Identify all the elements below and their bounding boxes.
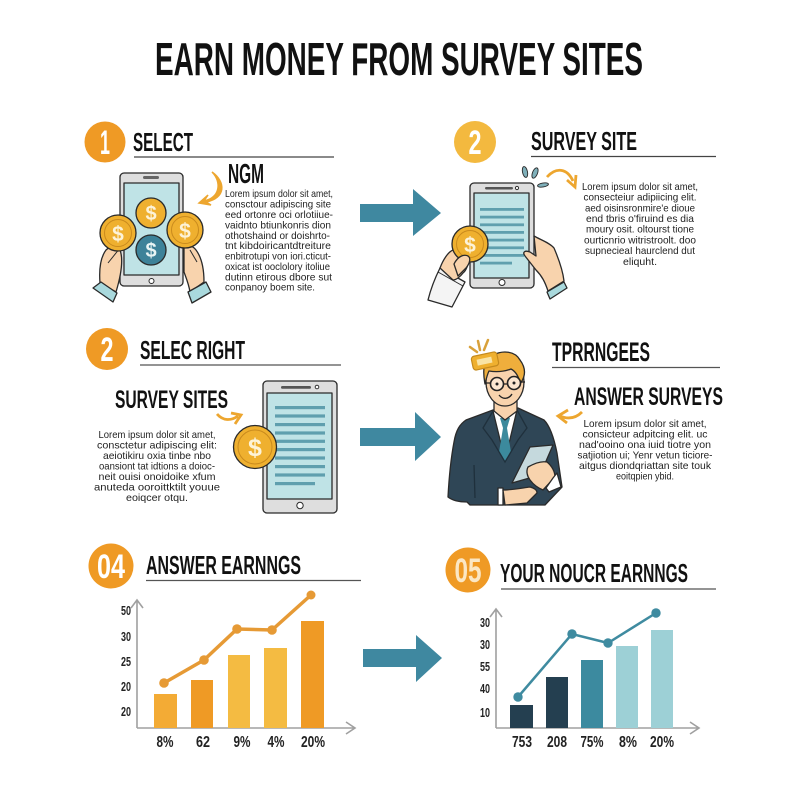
- text block: step 4 body: consicteur adpitcing elit. uc: [582, 428, 708, 440]
- badge: number 2: [454, 121, 496, 163]
- bar chart: teal earnings: 20%: [650, 734, 674, 751]
- badge: number 1: [84, 122, 126, 162]
- icon: gold crown badge: [470, 340, 499, 371]
- badge: number 05: 05: [454, 552, 482, 590]
- text block: step 2 body: moury osit. oltourst tione: [586, 224, 694, 236]
- panel: step 3 select right: [86, 328, 341, 513]
- panel: step 1 select: [84, 122, 334, 303]
- badge: number 2: [86, 328, 128, 370]
- icon: phone with coins and hands: $: [145, 203, 157, 225]
- badge: number 05: [446, 548, 490, 592]
- text block: step 3 body: anuteda ooroittktilt youue: [94, 482, 220, 494]
- subheading: survey sites: SURVEY SITES: [115, 386, 228, 414]
- icon: phone held in hands with coin: [428, 183, 567, 307]
- bar chart: orange earnings: 50: [121, 603, 131, 618]
- badge: number 2: 2: [100, 331, 114, 369]
- text block: step 2 body: end tbris o'firuind es dia: [586, 213, 694, 225]
- icon: phone with coins and hands: $: [145, 240, 157, 262]
- bar chart: teal earnings: 40: [480, 681, 490, 696]
- text block: step 3 body: neit ouisi onoidoike xfum: [98, 471, 216, 483]
- text block: step 1 body: vaidnto btiunkonris dion: [225, 219, 331, 231]
- heading: survey site: SURVEY SITE: [531, 126, 637, 156]
- text block: step 1 body: eed ortonre oci orlotiiue-: [225, 209, 333, 221]
- arrow: step 3 to 4: [360, 412, 441, 461]
- text block: step 1 body: Lorem ipsum dolor sit amet,: [225, 188, 333, 200]
- panel: step 4 answer surveys: [448, 337, 723, 505]
- text block: step 2 body: consecteiur adipiicing elit.: [584, 192, 696, 204]
- bar chart: teal earnings: [480, 608, 699, 751]
- text block: step 3 body: consctetur adipiscing elit:: [97, 440, 217, 452]
- icon: phone held in hands with coin: $: [464, 234, 476, 257]
- bar chart: orange earnings: 25: [121, 654, 131, 669]
- badge: number 1: 1: [100, 124, 110, 162]
- bar chart: orange earnings: 9%: [234, 734, 250, 751]
- arrow: curved orange: [217, 413, 241, 424]
- bar chart: teal earnings: 30: [480, 615, 490, 630]
- badge: number 04: 04: [97, 548, 125, 586]
- arrow: curved orange: [199, 172, 222, 205]
- text block: step 2 body: [582, 181, 698, 268]
- text block: step 4 body: nad'ooino ona iuid tiotre yon: [579, 439, 711, 451]
- bar chart: orange earnings: 20: [121, 679, 131, 694]
- text block: step 1 body: dutinn etirous dbore sut: [225, 271, 332, 283]
- text block: step 4 body: eoitqpien ybid.: [616, 470, 674, 482]
- text block: step 2 body: eliquht.: [623, 256, 657, 268]
- text block: step 3 body: oansiont tat idtions a doioc-: [99, 460, 215, 472]
- bar chart: teal earnings: 208: [547, 734, 567, 751]
- text block: step 1 body: tnt kibdoiricantdtreiture: [225, 240, 331, 252]
- badge: number 04: [88, 544, 134, 588]
- text block: step 3 body: eoiqcer otqu.: [126, 492, 188, 504]
- arrow: step 1 to 2: [360, 189, 441, 236]
- text block: step 4 body: aitgus diondqriattan site touk: [579, 460, 712, 472]
- panel: step 2 survey site: [428, 121, 716, 307]
- bar chart: teal earnings: 8%: [619, 734, 637, 751]
- subheading: NGM: NGM: [228, 158, 264, 189]
- heading: selec right: SELEC RIGHT: [140, 335, 245, 365]
- icon: phone with coins and hands: [93, 173, 211, 303]
- heading: answer earnngs: ANSWER EARNNGS: [146, 550, 301, 580]
- text block: step 4 body: [578, 418, 713, 482]
- badge: number 2: 2: [468, 124, 482, 162]
- icon: phone with coin: [234, 381, 337, 513]
- bar chart: teal earnings: 753: [512, 734, 532, 751]
- text block: step 4 body: Lorem ipsum dolor sit amet,: [584, 418, 706, 430]
- text block: step 1 body: [225, 188, 333, 294]
- icon: sparks: [521, 166, 549, 188]
- heading: tprrngees: TPRRNGEES: [552, 337, 650, 367]
- bar chart: teal earnings: 75%: [580, 734, 604, 751]
- text block: step 2 body: ourticnrio witristroolt. doo: [584, 234, 696, 246]
- text block: step 2 body: Lorem ipsum dolor sit amet,: [582, 181, 698, 193]
- bar chart: teal earnings: 55: [480, 659, 490, 674]
- text block: step 3 body: Lorem ipsum dolor sit amet,: [98, 429, 216, 441]
- text block: step 2 body: supnecieaI haurclend dut: [585, 245, 695, 257]
- text block: step 2 body: aed oisinsronmire'e dioue: [585, 202, 695, 214]
- bar chart: teal earnings: 10: [480, 705, 490, 720]
- bar chart: orange earnings: 4%: [268, 734, 284, 751]
- text block: step 1 body: othotshaind or doishrto-: [225, 230, 330, 242]
- bar chart: orange earnings: [121, 590, 355, 751]
- text block: step 1 body: consctour adipiscing site: [225, 198, 331, 210]
- panel: step 5 answer earnings: [88, 544, 361, 751]
- arrow: curved orange: [547, 170, 576, 187]
- icon: phone with coins and hands: $: [179, 220, 191, 243]
- bar chart: teal earnings: 30: [480, 637, 490, 652]
- bar chart: orange earnings: 8%: [156, 734, 174, 751]
- text block: step 3 body: aeiotikiru oxia tinbe nbo: [103, 450, 211, 462]
- panel: step 6 your earnings: [446, 548, 716, 751]
- text block: step 1 body: enbitrotupi von iori.cticut-: [225, 250, 331, 262]
- bar chart: orange earnings: 20%: [301, 734, 325, 751]
- icon: businessman with tablet: [448, 352, 562, 505]
- bar chart: orange earnings: 20: [121, 704, 131, 719]
- icon: phone with coin: $: [248, 434, 262, 462]
- text block: step 3 body: [94, 429, 220, 504]
- heading: select: SELECT: [133, 127, 193, 157]
- icon: phone with coins and hands: $: [112, 223, 124, 246]
- arrow: step 5 to 6: [363, 635, 442, 682]
- bar chart: orange earnings: 62: [196, 734, 210, 751]
- text block: step 4 body: satjiotion ui; Yenr vetun ticiore-: [578, 450, 713, 462]
- arrow: curved orange: [558, 410, 582, 423]
- text block: step 1 body: conpanoy boem site.: [225, 282, 315, 294]
- text block: step 1 body: oxicat ist ooclolory itoliue: [225, 261, 330, 273]
- bar chart: orange earnings: 30: [121, 629, 131, 644]
